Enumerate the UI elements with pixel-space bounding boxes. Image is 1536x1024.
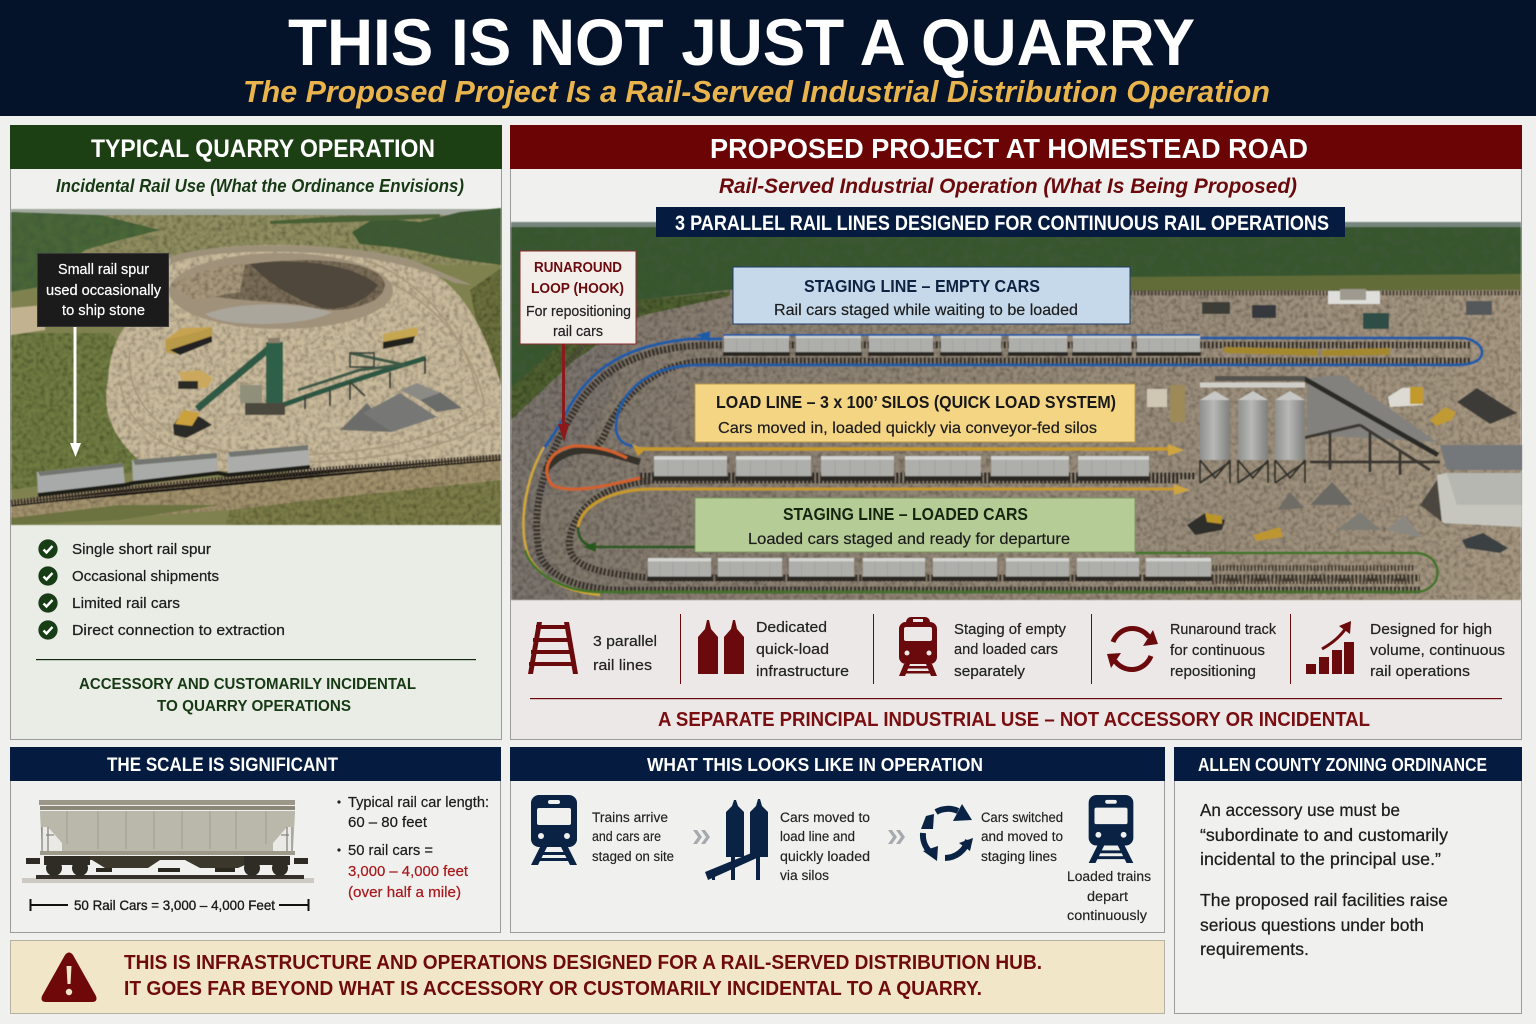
checklist [38, 540, 285, 640]
text: designed for high volume: Designed for high [1370, 621, 1492, 638]
panel heading: TYPICAL QUARRY OPERATION [91, 135, 435, 163]
text: trains arrive: staged on site [592, 849, 674, 864]
panel subheading: Incidental Rail Use (What the Ordinance Envisions) [56, 176, 464, 196]
text: staging of empty and loaded cars: and loaded cars [954, 641, 1058, 658]
text: trains arrive [592, 810, 674, 864]
icon: rail track [528, 622, 578, 674]
panel subheading: Rail-Served Industrial Operation (What Is Being Proposed) [719, 175, 1297, 198]
text: serious questions: requirements. [1200, 939, 1309, 959]
label: load line [695, 384, 1135, 442]
text: designed for high volume: volume, continuous [1370, 642, 1505, 659]
text: runaround track: repositioning [1170, 663, 1256, 680]
text: runaround track [1170, 621, 1276, 680]
text: serious questions [1200, 890, 1448, 959]
text: trains arrive: and cars are [592, 829, 661, 844]
label: load line: LOAD LINE – 3 x 100’ SILOS (QUICK LOAD SYSTEM) [716, 392, 1116, 412]
text: accessory use definition: “subordinate to and customarily [1200, 825, 1448, 845]
photo: rail site aerial [511, 222, 1522, 600]
rail car length facts: Typical rail car length: [348, 795, 489, 811]
icon: warning triangle [42, 952, 96, 1002]
panel: the scale is significant [10, 747, 501, 932]
text: accessory use definition: An accessory use must be [1200, 800, 1400, 820]
text: serious questions: serious questions under both [1200, 915, 1424, 935]
arrow: chevrons two [888, 830, 905, 844]
checklist: Single short rail spur [72, 541, 211, 558]
text: runaround track: for continuous [1170, 642, 1265, 659]
feature row [528, 614, 1505, 684]
callout: runaround loop: rail cars [553, 324, 603, 340]
text: cars moved to load line: quickly loaded [780, 849, 870, 864]
arrow: chevrons one [693, 830, 710, 844]
callout: small rail spur: used occasionally [46, 283, 162, 299]
panel heading [510, 747, 1165, 781]
rail car length facts: (over half a mile) [348, 885, 461, 901]
checklist: Limited rail cars [72, 595, 180, 612]
callout: runaround loop: RUNAROUND [534, 260, 622, 276]
conclusion: accessory and incidental [79, 676, 416, 715]
label: load line: Cars moved in, loaded quickly via conveyor-fed silos [718, 420, 1097, 437]
text: loaded trains depart: Loaded trains [1067, 869, 1151, 884]
text: loaded trains depart [1067, 869, 1151, 923]
rail car length facts [337, 795, 489, 901]
text: cars switched: staging lines [981, 849, 1057, 864]
text: cars switched [981, 810, 1063, 864]
text: dedicated quick-load infrastructure: quick-load [756, 641, 829, 658]
subtitle: The Proposed Project Is a Rail-Served Industrial Distribution Operation [243, 74, 1270, 109]
label: staging line loaded cars: STAGING LINE – LOADED CARS [783, 504, 1028, 524]
warning text: THIS IS INFRASTRUCTURE AND OPERATIONS DESIGNED FOR A RAIL-SERVED DISTRIBUTION HUB. [124, 952, 1042, 974]
checklist: Occasional shipments [72, 568, 219, 585]
text: staging of empty and loaded cars: Staging of empty [954, 621, 1066, 638]
label: staging line empty cars: STAGING LINE – EMPTY CARS [804, 276, 1040, 296]
label: staging line empty cars [733, 267, 1130, 324]
icon: rising bar chart [1306, 621, 1354, 674]
banner: three parallel rail lines [656, 207, 1345, 237]
panel heading: ALLEN COUNTY ZONING ORDINANCE [1198, 755, 1487, 775]
text: trains arrive: Trains arrive [592, 810, 668, 825]
panel heading: WHAT THIS LOOKS LIKE IN OPERATION [647, 754, 983, 775]
text: three parallel rail lines [593, 633, 657, 674]
callout: runaround loop: For repositioning [526, 304, 631, 320]
text: loaded trains depart: continuously [1067, 908, 1147, 923]
panel: proposed project at Homestead Road [510, 125, 1522, 740]
text: staging of empty and loaded cars: separately [954, 663, 1026, 680]
text: designed for high volume: rail operations [1370, 663, 1470, 680]
callout: small rail spur: Small rail spur [58, 262, 149, 278]
header banner [0, 0, 1536, 116]
text: staging of empty and loaded cars [954, 621, 1066, 680]
conclusion: accessory and incidental: ACCESSORY AND CUSTOMARILY INCIDENTAL [79, 676, 416, 693]
callout: distribution hub warning [10, 940, 1164, 1014]
panel: what this looks like in operation [510, 747, 1165, 932]
label: staging line empty cars: Rail cars staged while waiting to be loaded [774, 302, 1078, 319]
rail car length facts: 3,000 – 4,000 feet [348, 864, 468, 880]
text: cars moved to load line: via silos [780, 868, 829, 883]
callout: small rail spur: to ship stone [62, 303, 145, 319]
text: dedicated quick-load infrastructure: Dedicated [756, 619, 827, 636]
banner: three parallel rail lines: 3 PARALLEL RAIL LINES DESIGNED FOR CONTINUOUS RAIL OPERATIONS [675, 212, 1329, 235]
rail car length facts: 60 – 80 feet [348, 815, 427, 831]
text: dedicated quick-load infrastructure: infrastructure [756, 663, 849, 680]
icon: silos [698, 620, 744, 674]
callout: small rail spur [38, 254, 168, 326]
illustration: hopper rail car [22, 800, 314, 883]
icon: train [899, 617, 937, 676]
text: three parallel rail lines: 3 parallel [593, 633, 657, 650]
arrow: callout to rail spur [70, 327, 81, 457]
text: cars switched: Cars switched [981, 810, 1063, 825]
warning text: IT GOES FAR BEYOND WHAT IS ACCESSORY OR CUSTOMARILY INCIDENTAL TO A QUARRY. [124, 978, 982, 1000]
icon: switching arrows [921, 804, 973, 861]
callout: runaround loop [520, 251, 636, 344]
text: loaded trains depart: depart [1087, 889, 1128, 904]
icon: arriving train [531, 795, 577, 865]
label: staging line loaded cars [695, 498, 1135, 552]
arrow: runaround loop pointer [558, 344, 569, 442]
checklist: Direct connection to extraction [72, 622, 285, 639]
panel heading [10, 747, 501, 781]
panel: Allen County zoning ordinance [1174, 747, 1522, 1014]
icon: circular arrows [1107, 628, 1158, 670]
text: accessory use definition [1200, 800, 1448, 869]
text: accessory use definition: incidental to the principal use.” [1200, 849, 1441, 869]
panel: typical quarry operation [10, 125, 502, 740]
conclusion: accessory and incidental: TO QUARRY OPERATIONS [157, 698, 351, 715]
text: designed for high volume [1370, 621, 1505, 680]
text: cars moved to load line: Cars moved to [780, 810, 870, 825]
photo: quarry aerial [11, 208, 501, 525]
text: serious questions: The proposed rail facilities raise [1200, 890, 1448, 910]
text: dedicated quick-load infrastructure [756, 619, 849, 680]
text: cars switched: and moved to [981, 829, 1063, 844]
text: runaround track: Runaround track [1170, 621, 1276, 638]
panel heading: PROPOSED PROJECT AT HOMESTEAD ROAD [710, 133, 1308, 164]
title: THIS IS NOT JUST A QUARRY [288, 5, 1195, 79]
panel heading: THE SCALE IS SIGNIFICANT [107, 755, 338, 776]
label: staging line loaded cars: Loaded cars staged and ready for departure [748, 531, 1070, 548]
rail car length facts: 50 rail cars = [348, 843, 433, 859]
text: cars moved to load line: load line and [780, 829, 855, 844]
warning text [124, 952, 1042, 1000]
conclusion: separate principal industrial use: A SEPARATE PRINCIPAL INDUSTRIAL USE – NOT ACCESSORY OR INCIDENTAL [658, 709, 1370, 731]
panel heading [510, 125, 1522, 169]
dimension line: fifty rail cars: 50 Rail Cars = 3,000 – 4,000 Feet [74, 897, 275, 913]
callout: runaround loop: LOOP (HOOK) [531, 281, 624, 297]
text: cars moved to load line [780, 810, 870, 883]
panel heading [10, 125, 502, 169]
text: three parallel rail lines: rail lines [593, 657, 652, 674]
icon: silos with conveyor [705, 799, 768, 880]
icon: departing train [1089, 795, 1133, 863]
panel heading [1174, 747, 1522, 781]
